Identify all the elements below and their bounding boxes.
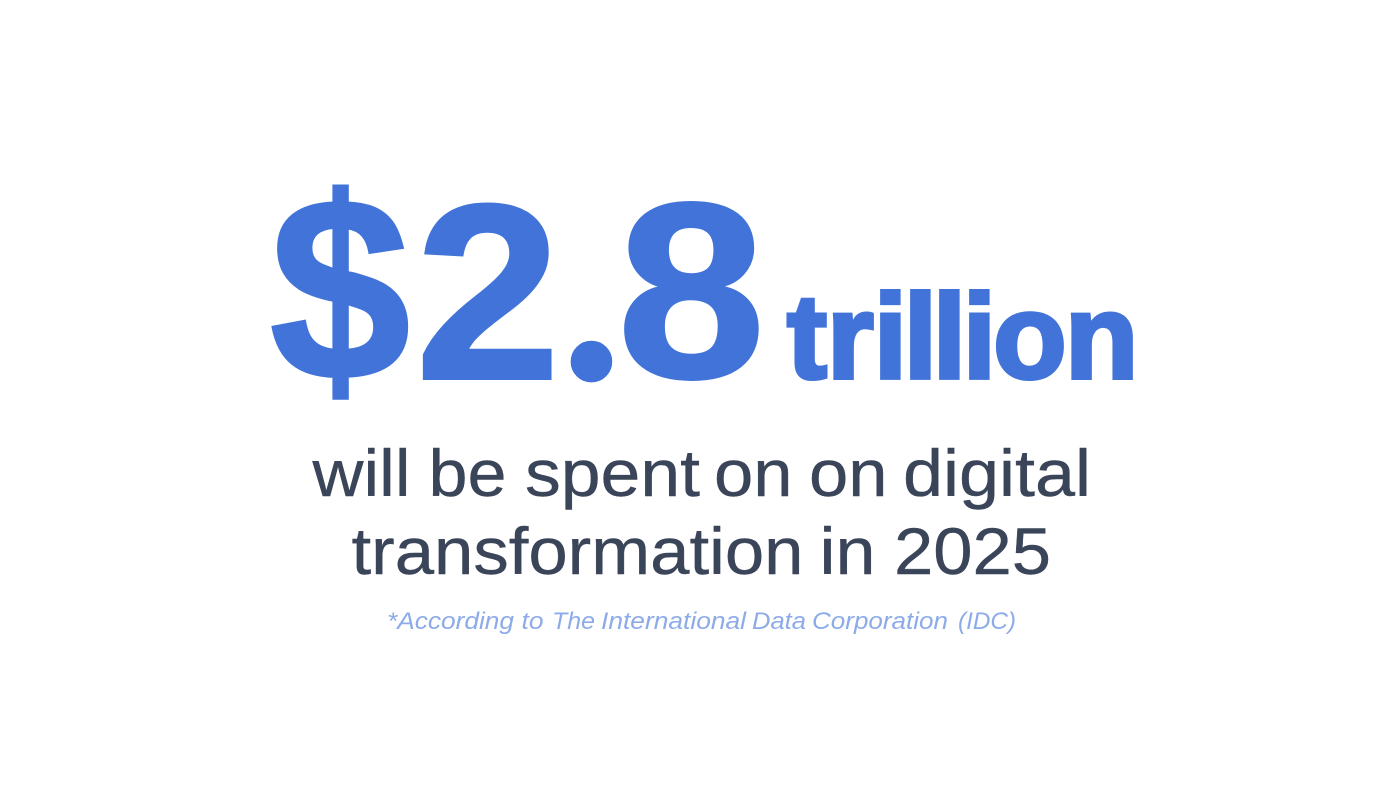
description line 1: will [311,436,410,510]
description line 2: 2025 [894,514,1051,588]
description line 1: be [428,436,506,510]
source footnote: Corporation [812,608,948,635]
source footnote: (IDC) [958,608,1016,635]
description line 1: on [714,436,792,510]
source footnote: The [552,608,595,635]
description line 2 [352,514,1051,588]
description text [311,436,1091,588]
source footnote [387,608,1016,635]
description line 1: spent [525,436,700,510]
source footnote: Data [752,608,806,635]
amount: $2.8 [270,145,765,435]
amount: $2.8: $ [270,145,410,435]
description line 2: in [820,514,876,588]
description line 1 [311,436,1091,510]
source footnote: to [522,608,544,635]
amount: $2.8: 8 [617,151,765,430]
unit: trillion: trillion [787,270,1138,404]
description line 2: transformation [352,514,804,588]
source footnote: International [601,608,747,635]
amount: $2.8: 2 [415,152,560,432]
source footnote: *According [387,608,515,635]
amount: $2.8: . [562,166,621,430]
description line 1: on [809,436,888,510]
description line 1: digital [903,436,1091,510]
headline figure [270,145,1138,435]
